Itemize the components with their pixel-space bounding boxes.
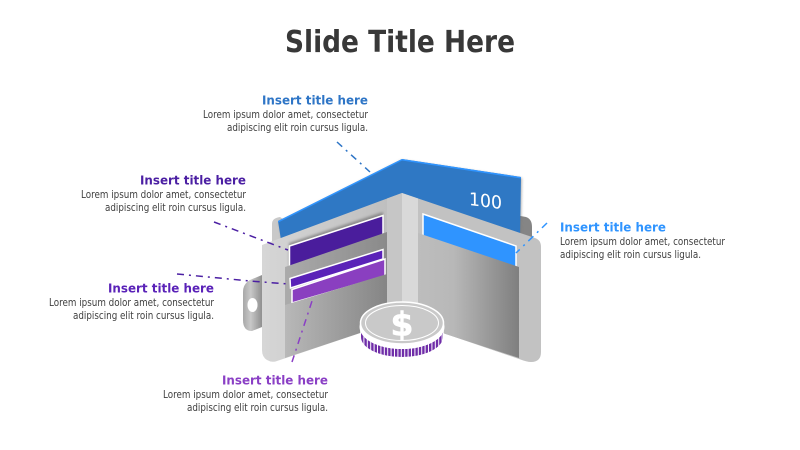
violet card: [290, 250, 383, 288]
coin face: $: [391, 304, 413, 344]
wallet illustration: [243, 159, 541, 362]
text block: blue: adipiscing elit roin cursus ligula.: [227, 123, 368, 134]
text block: purple: [163, 374, 329, 414]
text block: purple: Lorem ipsum dolor amet, consectetur: [163, 390, 329, 401]
connector: violet: [177, 274, 288, 284]
text block: violet: [49, 282, 215, 322]
text block: purple: adipiscing elit roin cursus ligula.: [187, 403, 328, 414]
banknote: 100: [469, 189, 502, 214]
title: Slide Title Here: [285, 25, 515, 60]
text block: violet: Lorem ipsum dolor amet, consectetur: [49, 298, 215, 309]
text block: violet: Insert title here: [108, 282, 214, 296]
connector: purple: [292, 298, 313, 362]
coin: [360, 302, 444, 358]
dark purple card: [289, 212, 383, 272]
connector: light blue: [516, 223, 547, 253]
text block: blue: [203, 94, 369, 134]
spine: [387, 193, 418, 325]
coin edge: [360, 305, 444, 358]
text block: blue: Lorem ipsum dolor amet, consectetur: [203, 110, 369, 121]
text block: violet: adipiscing elit roin cursus ligula.: [73, 311, 214, 322]
connector: blue: [337, 142, 370, 172]
text block: dark purple: [81, 174, 247, 214]
text block: dark purple: adipiscing elit roin cursus ligula.: [105, 203, 246, 214]
text block: blue: Insert title here: [262, 94, 368, 108]
connector: dark purple: [214, 222, 288, 250]
left wallet panel: [262, 193, 402, 362]
banknote: [278, 159, 522, 240]
wallet back tabs: [272, 215, 532, 250]
text block: dark purple: Lorem ipsum dolor amet, consectetur: [81, 190, 247, 201]
clasp strap: [243, 275, 262, 331]
left front pocket: [285, 274, 387, 358]
purple card: [292, 259, 385, 303]
text block: light blue: [560, 220, 726, 261]
text block: light blue: Insert title here: [560, 220, 666, 236]
text block: light blue: Lorem ipsum dolor amet, consectetur: [560, 237, 726, 248]
text block: purple: Insert title here: [222, 374, 328, 388]
right front pocket: [418, 214, 519, 358]
right wallet panel: [402, 193, 541, 362]
text block: dark purple: Insert title here: [140, 174, 246, 188]
text block: light blue: adipiscing elit roin cursus ligula.: [560, 250, 701, 261]
middle pocket: [285, 232, 387, 320]
